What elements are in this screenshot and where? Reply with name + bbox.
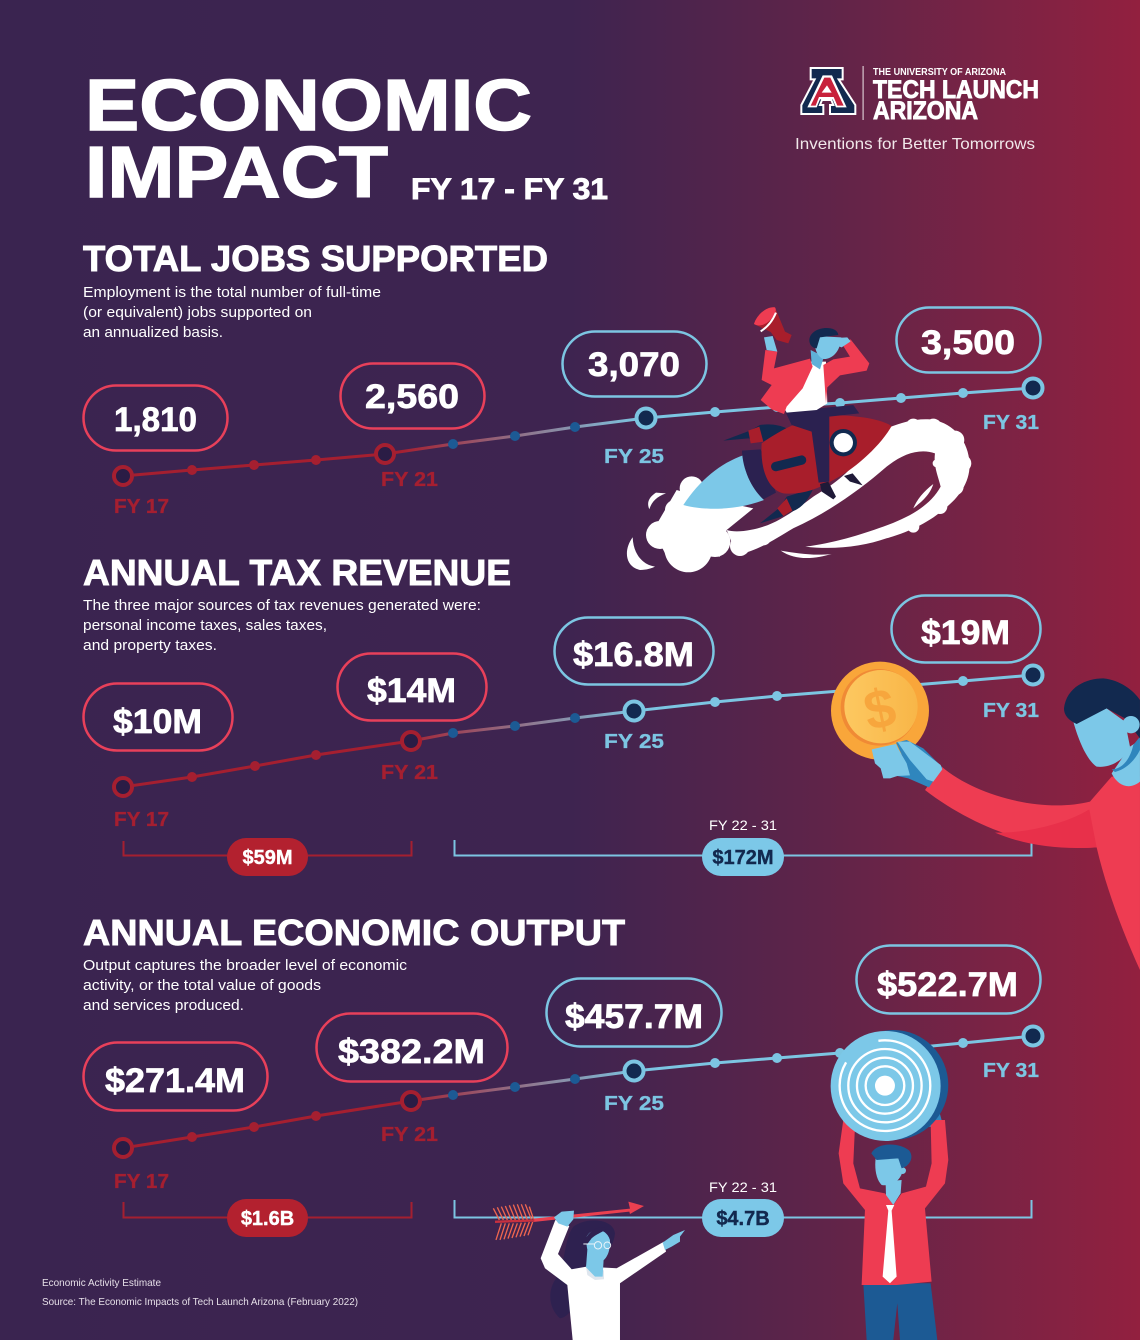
line chart: tax revenue (114, 666, 1042, 831)
logo: Tech Launch Arizona: TECH LAUNCH (873, 76, 1039, 104)
value pills: $10M (113, 703, 202, 741)
arrow (533, 1202, 644, 1222)
value pills: $457.7M (565, 998, 703, 1036)
illustration: man holding target (831, 1030, 948, 1340)
bracket: cumulative FY 22-31: FY 22 - 31 (709, 817, 777, 833)
line chart: economic output: FY 31 (983, 1060, 1039, 1082)
porthole (830, 429, 857, 456)
nozzle (742, 449, 776, 499)
title: IMPACT (85, 133, 388, 213)
source note: Source: The Economic Impacts of Tech Launch Arizona (February 2022) (42, 1296, 358, 1308)
heading: ANNUAL ECONOMIC OUTPUT (83, 912, 625, 953)
streak (913, 484, 933, 508)
head (1073, 708, 1130, 767)
panel: annual economic output (83, 912, 1042, 1237)
hand pointing (663, 1230, 685, 1250)
value pills: 3,070 (588, 346, 680, 384)
line chart: economic output: FY 17 (114, 1171, 169, 1193)
bracket: cumulative FY 22-31 (454, 1179, 1032, 1237)
line chart: economic output: FY 21 (381, 1124, 438, 1146)
bracket: cumulative FY 22-31: FY 22 - 31 (709, 1179, 777, 1195)
value pills: $19M (921, 614, 1010, 652)
head (875, 1158, 903, 1185)
panel: total jobs supported (83, 238, 1042, 518)
description: and property taxes. (83, 637, 217, 654)
description: personal income taxes, sales taxes, (83, 617, 327, 634)
tie (883, 1205, 897, 1283)
heading: ANNUAL TAX REVENUE (83, 552, 511, 593)
description (83, 284, 381, 341)
value pills: $271.4M (105, 1062, 245, 1100)
line chart: jobs: FY 31 (983, 412, 1039, 434)
description: Employment is the total number of full-time (83, 284, 381, 301)
source note: Economic Activity Estimate (42, 1277, 161, 1289)
jacket with raised arms (839, 1120, 948, 1285)
bracket: cumulative FY 17-21: $1.6B (241, 1208, 294, 1230)
bracket: cumulative FY 17-21 (124, 1199, 412, 1237)
legs (785, 405, 859, 483)
bracket: cumulative FY 17-21 (124, 838, 412, 876)
value pills: $382.2M (338, 1033, 485, 1071)
slot (770, 454, 807, 472)
flame (683, 455, 764, 509)
coin: $ (858, 676, 901, 743)
neck (886, 1180, 902, 1205)
illustration: woman with arrow (493, 1202, 685, 1340)
line chart: jobs: FY 25 (604, 446, 664, 468)
bracket: cumulative FY 17-21: $59M (242, 847, 293, 869)
description: (or equivalent) jobs supported on (83, 304, 312, 321)
hand (928, 1112, 944, 1128)
logo: Tech Launch Arizona: THE UNIVERSITY OF ARIZONA (873, 67, 1006, 78)
hand raised (554, 1211, 574, 1227)
line chart: economic output: FY 25 (604, 1093, 664, 1115)
hair (550, 1220, 615, 1318)
line chart: tax revenue: FY 21 (381, 762, 438, 784)
description: and services produced. (83, 997, 244, 1014)
description: Output captures the broader level of economic (83, 957, 408, 974)
logo: Tech Launch Arizona (795, 66, 1039, 153)
description: The three major sources of tax revenues generated were: (83, 597, 481, 614)
value pills (84, 308, 1040, 450)
line chart: jobs (114, 378, 1042, 518)
title: ECONOMIC (85, 66, 532, 146)
glasses (583, 1242, 611, 1249)
neck (1112, 740, 1140, 786)
line chart: tax revenue: FY 17 (114, 809, 169, 831)
value pills: 3,500 (921, 324, 1015, 362)
hand (896, 740, 942, 787)
logo: Tech Launch Arizona: ARIZONA (873, 97, 978, 125)
line chart: jobs: FY 17 (114, 496, 169, 518)
bracket: cumulative FY 22-31: $4.7B (716, 1208, 770, 1230)
description (83, 957, 408, 1014)
value pills: $16.8M (573, 636, 694, 674)
megaphone (754, 307, 792, 352)
divider (862, 66, 864, 120)
value pills: 1,810 (114, 401, 197, 439)
upper fin (723, 424, 787, 442)
smoke trail (627, 419, 971, 572)
value pills (84, 946, 1040, 1110)
illustration: person holding coin (831, 662, 1140, 970)
body (925, 767, 1140, 970)
rocket body (761, 415, 892, 494)
bracket: cumulative FY 22-31 (454, 817, 1032, 876)
jacket (761, 350, 813, 414)
shirt (541, 1220, 666, 1340)
value pills: $14M (367, 672, 456, 710)
description: activity, or the total value of goods (83, 977, 321, 994)
shirt (783, 362, 827, 413)
description: an annualized basis. (83, 324, 223, 341)
panel: annual tax revenue (83, 552, 1042, 876)
source note (42, 1277, 358, 1308)
value pills (84, 596, 1040, 750)
title: FY 17 - FY 31 (411, 173, 608, 206)
pants (863, 1283, 937, 1340)
coin (831, 662, 929, 760)
bracket: cumulative FY 22-31: $172M (712, 847, 774, 869)
heading: TOTAL JOBS SUPPORTED (83, 238, 548, 279)
title (85, 66, 608, 213)
neck and head (586, 1250, 604, 1277)
target (831, 1030, 948, 1141)
lower fin (760, 488, 813, 523)
line chart: tax revenue: FY 25 (604, 731, 664, 753)
value pills: $522.7M (877, 966, 1018, 1004)
value pills: 2,560 (365, 378, 459, 416)
icon: block A (801, 68, 855, 114)
illustration: man riding rocket (627, 307, 971, 572)
line chart: jobs: FY 21 (381, 469, 438, 491)
collar (586, 1267, 604, 1280)
neck and head (811, 350, 824, 369)
line chart: economic output (114, 1026, 1042, 1193)
logo: Tech Launch Arizona: Inventions for Better Tomorrows (795, 136, 1035, 153)
description (83, 597, 481, 654)
line chart: tax revenue: FY 31 (983, 700, 1039, 722)
